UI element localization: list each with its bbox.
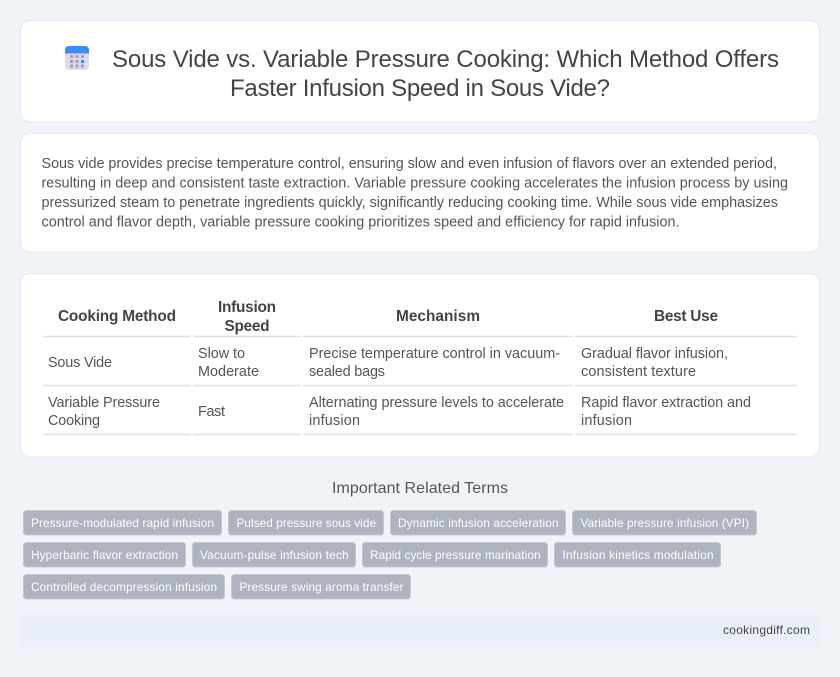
table row: variable pressure cooking: Variable Pressure	[48, 395, 160, 411]
text block: summary paragraph: pressurized steam to penetrate ingredients quickly, significantly reducing cooking time. While sous vide emphasizes	[42, 195, 778, 211]
tag: Pressure swing aroma transfer	[240, 580, 404, 594]
table row: sous vide: Moderate	[198, 364, 259, 380]
tag: Infusion kinetics modulation	[562, 548, 714, 562]
table row: sous vide: Sous Vide	[48, 355, 112, 371]
tag: Dynamic infusion acceleration	[398, 516, 558, 530]
table header row	[58, 299, 718, 335]
tag: Hyperbaric flavor extraction	[31, 548, 178, 562]
table header row: Best Use	[654, 308, 718, 325]
tag	[572, 510, 756, 535]
table row: sous vide: Slow to	[198, 346, 245, 362]
heading: important related terms: Important Related Terms	[332, 480, 508, 497]
tag	[554, 542, 720, 567]
panel: comparison table	[20, 274, 820, 457]
text block: summary paragraph: resulting in deep and consistent taste extraction. Variable pressure cooking accelerates the infusion process by using	[42, 176, 788, 192]
table row: variable pressure cooking: Alternating pressure levels to accelerate	[309, 395, 564, 411]
table row: variable pressure cooking: Cooking	[48, 413, 100, 429]
table header row: Cooking Method	[58, 308, 176, 325]
icon: calendar	[65, 46, 89, 70]
title: Sous Vide vs. Variable Pressure Cooking: Which Method Offers	[112, 46, 779, 73]
tag	[24, 510, 222, 535]
table header row: Speed	[224, 318, 270, 335]
text block: summary paragraph: control and flavor depth, variable pressure cooking prioritizes speed and efficiency for rapid infusion.	[42, 214, 680, 230]
table row: variable pressure cooking: infusion	[309, 413, 360, 429]
table row: variable pressure cooking: infusion	[581, 413, 632, 429]
table row: variable pressure cooking: Rapid flavor extraction and	[581, 395, 751, 411]
table row: sous vide: consistent texture	[581, 364, 696, 380]
title: Faster Infusion Speed in Sous Vide?	[230, 75, 610, 102]
footer bar	[20, 613, 820, 647]
table row: sous vide: Gradual flavor infusion,	[581, 346, 728, 362]
text block: summary paragraph	[42, 156, 788, 230]
footer source text: cookingdiff.com	[723, 623, 810, 637]
table row: variable pressure cooking	[48, 395, 751, 429]
text block: summary paragraph: Sous vide provides precise temperature control, ensuring slow and even infusion of flavors over an extended period,	[42, 156, 777, 172]
tag	[362, 542, 548, 567]
tag	[24, 542, 186, 567]
tag	[192, 542, 356, 567]
tag	[24, 574, 224, 599]
tag	[232, 574, 410, 599]
tag: Rapid cycle pressure marination	[370, 548, 540, 562]
tag	[390, 510, 566, 535]
tag	[228, 510, 384, 535]
tag: Pulsed pressure sous vide	[236, 516, 376, 530]
table header row: Mechanism	[396, 308, 480, 325]
table header row: Infusion	[218, 299, 276, 316]
title	[112, 46, 779, 102]
table row: sous vide	[48, 346, 728, 380]
table row: sous vide: sealed bags	[309, 364, 385, 380]
tag: Vacuum-pulse infusion tech	[200, 548, 348, 562]
tag: Controlled decompression infusion	[31, 580, 217, 594]
table row: sous vide: Precise temperature control in vacuum-	[309, 346, 560, 362]
panel: introduction	[20, 134, 820, 252]
tags: related terms	[24, 510, 756, 599]
tag: Pressure-modulated rapid infusion	[31, 516, 214, 530]
table row: variable pressure cooking: Fast	[198, 404, 225, 420]
panel: title header	[20, 20, 820, 122]
tag: Variable pressure infusion (VPI)	[580, 516, 749, 530]
